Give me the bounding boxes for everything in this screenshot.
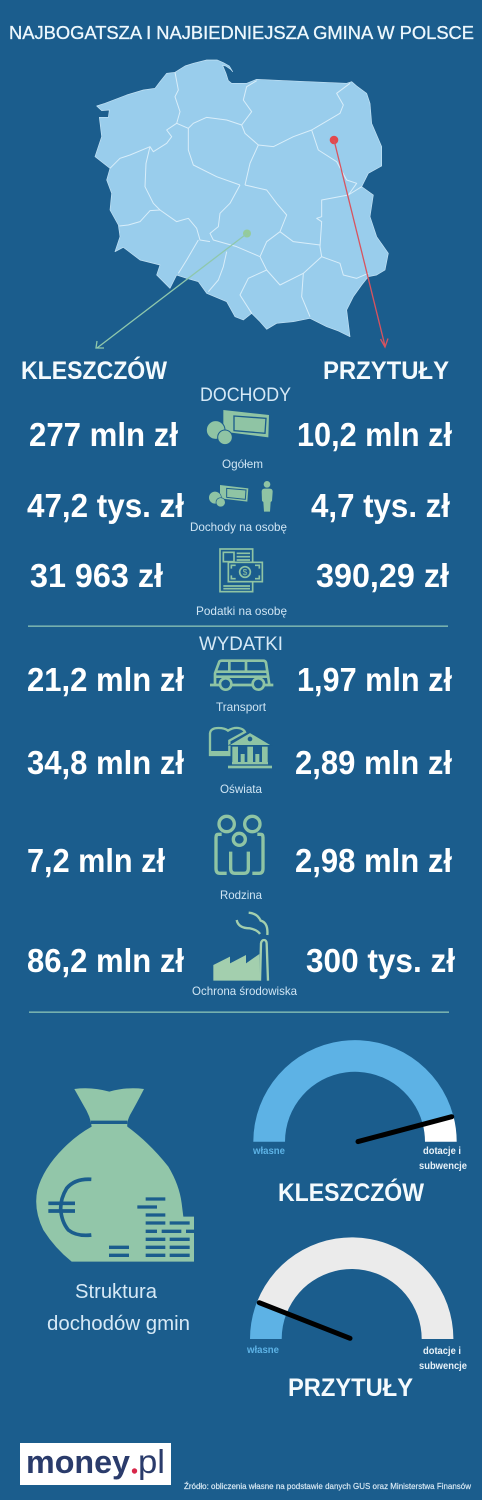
- icon: money bag: [36, 1088, 194, 1262]
- row: dochody na osobę: [27, 481, 450, 534]
- title: NAJBOGATSZA I NAJBIEDNIEJSZA GMINA W POLSCE: [9, 23, 474, 43]
- gauge: Kleszczów: dotacje i: [423, 1146, 461, 1157]
- row: dochody na osobę: 47,2 tys. zł: [27, 487, 184, 524]
- gauge: Kleszczów: subwencje: [419, 1161, 467, 1172]
- gauge: Przytuły: subwencje: [419, 1361, 467, 1372]
- row: transport: [27, 661, 452, 714]
- caption: struktura dochodów gmin: dochodów gmin: [47, 1313, 190, 1335]
- row: podatki na osobę: Podatki na osobę: [196, 604, 287, 618]
- row: ochrona środowiska: Ochrona środowiska: [192, 984, 297, 998]
- gauge: Kleszczów: własne: [252, 1146, 285, 1157]
- icon: book and bank building: [209, 728, 272, 768]
- arrow: map point to Przytuły: [330, 136, 388, 347]
- row: podatki na osobę: 390,29 zł: [316, 557, 449, 594]
- heading: Przytuły: PRZYTUŁY: [323, 357, 449, 385]
- row: ogółem: 277 mln zł: [29, 416, 178, 453]
- row: rodzina: [27, 816, 452, 902]
- caption: struktura dochodów gmin: [47, 1281, 190, 1335]
- row: ogółem: [29, 410, 452, 471]
- section heading: wydatki: WYDATKI: [199, 634, 283, 655]
- row: ogółem: Ogółem: [222, 457, 263, 471]
- row: oświata: 34,8 mln zł: [27, 744, 184, 781]
- row: oświata: Oświata: [220, 782, 262, 796]
- row: podatki na osobę: [30, 549, 449, 618]
- row: ochrona środowiska: 86,2 mln zł: [27, 942, 184, 979]
- gauge: Przytuły: własne: [246, 1345, 279, 1356]
- caption: struktura dochodów gmin: Struktura: [75, 1281, 158, 1303]
- icon: banknote and person: [209, 481, 273, 512]
- row: oświata: [27, 728, 452, 796]
- section heading: dochody: DOCHODY: [200, 385, 291, 406]
- icon: factory: [213, 913, 268, 981]
- heading: Kleszczów: KLESZCZÓW: [21, 355, 167, 385]
- gauge: Kleszczów: [252, 1040, 467, 1172]
- row: ochrona środowiska: [27, 913, 455, 998]
- row: transport: 21,2 mln zł: [27, 661, 184, 698]
- row: oświata: 2,89 mln zł: [295, 744, 452, 781]
- row: ochrona środowiska: 300 tys. zł: [306, 942, 455, 979]
- icon: tax form with banknote: [220, 549, 262, 592]
- icon: banknote and coins: [206, 410, 269, 445]
- gauge: Przytuły: [246, 1237, 467, 1372]
- row: dochody na osobę: 4,7 tys. zł: [311, 487, 450, 524]
- row: rodzina: 2,98 mln zł: [295, 842, 452, 879]
- logo: money.pl: money: [26, 1444, 130, 1480]
- row: ogółem: 10,2 mln zł: [297, 416, 452, 453]
- source note: Źródło: obliczenia własne na podstawie danych GUS oraz Ministerstwa Finansów: [184, 1481, 472, 1491]
- label: Przytuły: PRZYTUŁY: [288, 1374, 413, 1402]
- icon: tax form with banknote: $: [243, 567, 248, 577]
- logo: money.pl: [20, 1443, 171, 1485]
- logo: money.pl: pl: [138, 1443, 165, 1480]
- row: rodzina: Rodzina: [220, 888, 262, 902]
- icon: family: [216, 816, 263, 873]
- icon: bus: [210, 661, 273, 690]
- gauge: Przytuły: dotacje i: [423, 1346, 461, 1357]
- row: transport: 1,97 mln zł: [297, 661, 452, 698]
- arrow: map point to Kleszczów: [96, 230, 251, 348]
- row: transport: Transport: [216, 700, 267, 714]
- row: dochody na osobę: Dochody na osobę: [190, 520, 287, 534]
- map of Poland: [95, 60, 388, 337]
- row: rodzina: 7,2 mln zł: [27, 842, 165, 879]
- row: podatki na osobę: 31 963 zł: [30, 557, 163, 594]
- label: Kleszczów: KLESZCZÓW: [278, 1177, 424, 1207]
